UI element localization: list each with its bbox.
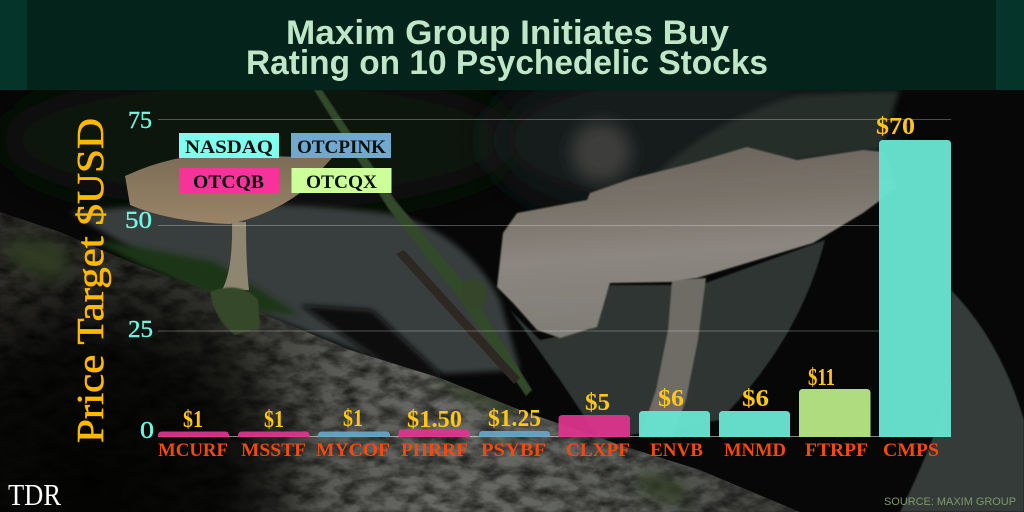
source note: SOURCE: MAXIM GROUP: [884, 496, 1016, 508]
ticker labels: MSSTF: [241, 441, 306, 461]
y-axis labels: 0: [140, 418, 154, 444]
legend: OTCQB: OTCQB: [193, 172, 264, 193]
legend: OTCQB: [179, 168, 279, 193]
ticker labels: FTRPF: [805, 441, 868, 461]
legend: OTCQX: [292, 168, 392, 193]
gridlines: [158, 120, 951, 436]
bar: PSYBF: [479, 431, 550, 437]
y-axis labels: [125, 108, 154, 444]
legend: NASDAQ: [179, 133, 279, 158]
ticker labels: PSYBF: [481, 441, 546, 461]
ticker labels: ENVB: [650, 441, 703, 461]
bar: FTRPF: [799, 389, 870, 437]
value labels: $1: [264, 407, 284, 433]
value labels: $70: [876, 114, 915, 140]
value labels: $6: [742, 386, 769, 412]
legend: NASDAQ: NASDAQ: [185, 137, 273, 158]
value labels: $1.25: [488, 406, 541, 432]
ticker labels: CLXPF: [566, 441, 630, 461]
value labels: $6: [658, 386, 684, 412]
bar: MCURF: [158, 432, 229, 437]
header band: [0, 0, 1024, 90]
legend: OTCPINK: OTCPINK: [297, 137, 386, 158]
bar: MSSTF: [238, 432, 310, 437]
value labels: $11: [808, 365, 835, 391]
title: Maxim Group Initiates Buy: [286, 14, 729, 52]
value labels: $1.50: [407, 407, 462, 433]
value labels: $1: [343, 406, 363, 432]
title: Rating on 10 Psychedelic Stocks: [246, 44, 768, 82]
y-axis labels: 75: [128, 108, 152, 134]
value labels: $5: [585, 390, 610, 416]
bar: CMPS: [879, 140, 951, 437]
value labels: $1: [183, 407, 203, 433]
y-axis labels: 50: [125, 208, 152, 234]
bar: MNMD: [719, 411, 790, 437]
ticker labels: MNMD: [724, 441, 786, 461]
ticker labels: [158, 441, 939, 461]
y-axis title: Price Target $USD: [70, 118, 112, 443]
bar chart: [158, 140, 951, 437]
ticker labels: MYCOF: [316, 441, 390, 461]
bar: MYCOF: [318, 432, 390, 437]
legend: [179, 133, 392, 193]
logo: TDR: TDR: [8, 477, 61, 512]
title: [246, 14, 768, 82]
bar: CLXPF: [558, 415, 630, 437]
bar: PHRRF: [398, 430, 470, 437]
ticker labels: PHRRF: [401, 441, 468, 461]
y-axis labels: 25: [128, 317, 153, 343]
bar: ENVB: [639, 411, 710, 437]
value labels: [183, 114, 915, 433]
ticker labels: MCURF: [158, 441, 228, 461]
ticker labels: CMPS: [883, 441, 939, 461]
legend: OTCQX: OTCQX: [306, 172, 377, 193]
